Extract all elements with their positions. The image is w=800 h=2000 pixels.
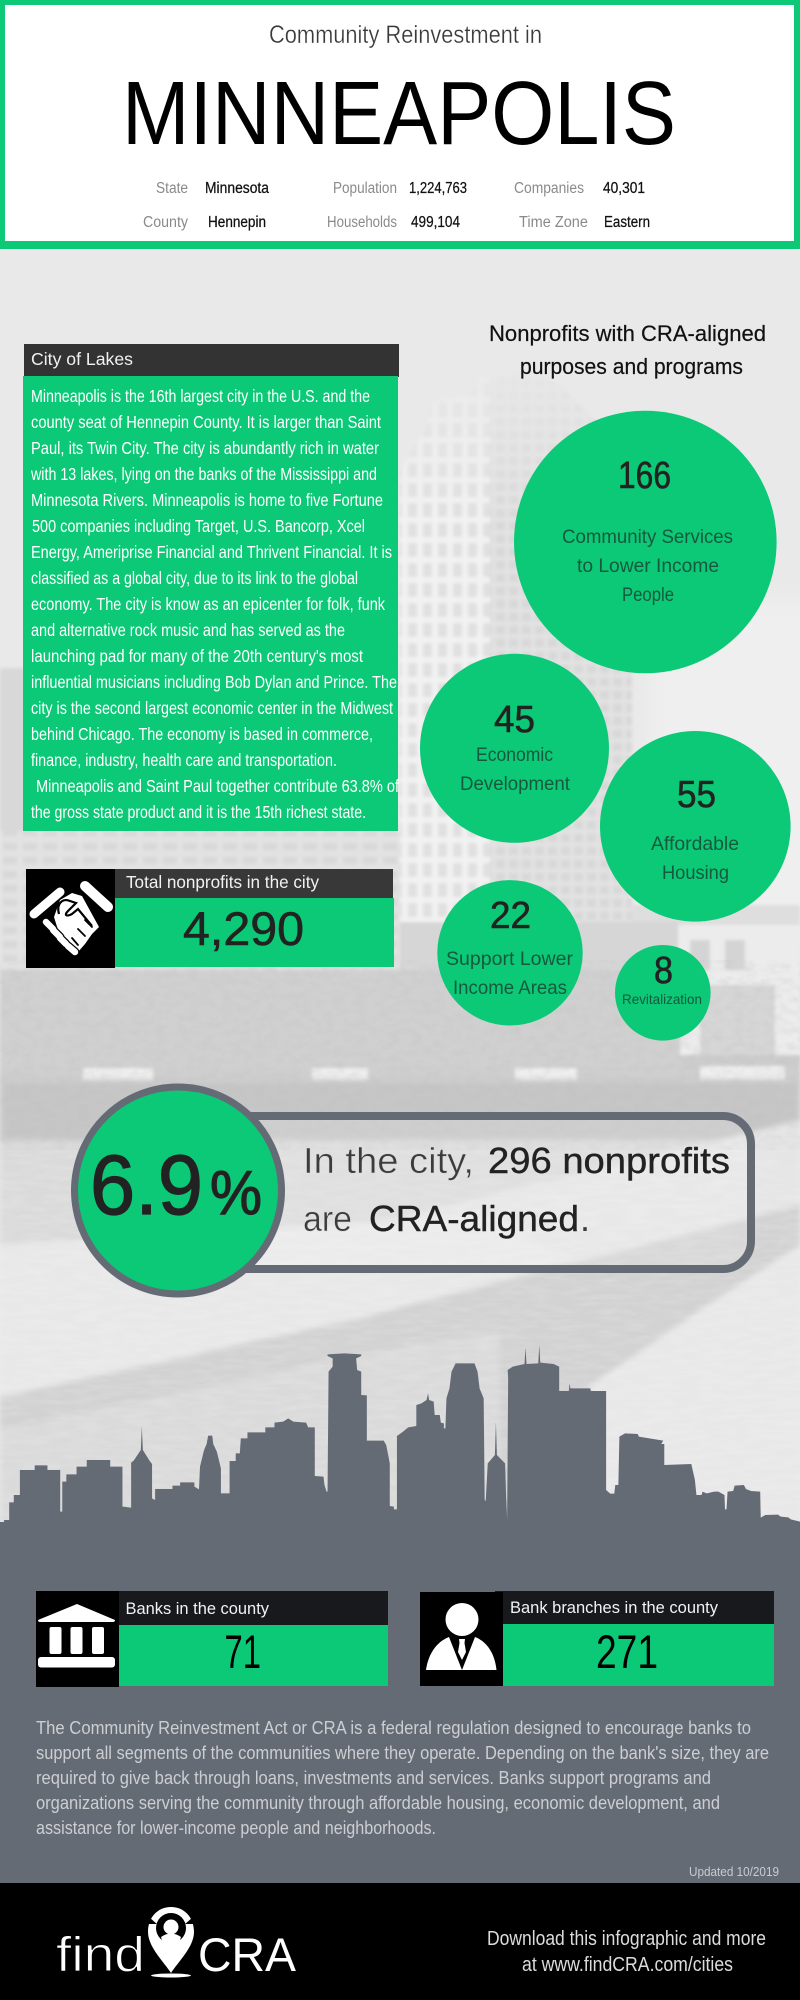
circle: Community Services to Lower Income People: Community Services [562,526,733,548]
text block: explanation of the CRA: required to give back through loans, investments and services. Banks support programs and [36,1768,711,1788]
callout: 6.9% of nonprofits are CRA-aligned [74,1087,751,1294]
panel body text: influential musicians including Bob Dylan and Prince. The [31,672,397,692]
circle: Economic Development [420,654,609,843]
panel body text: and alternative rock music and has served as the [31,620,345,640]
circle: Economic Development: Development [460,773,571,795]
callout sentence: In the city, [303,1140,474,1181]
circle: Affordable Housing: Housing [662,862,729,884]
city facts table: 40,301 [603,180,645,197]
stat label: Total nonprofits in the city [126,872,319,892]
city facts table: State [156,180,188,197]
circle: Affordable Housing: 55 [677,774,716,816]
stat value: 271 [596,1625,658,1678]
text block: explanation of the CRA: organizations serving the community through affordable housing, economic development, and [36,1793,720,1813]
circle: Community Services to Lower Income People: to Lower Income [577,555,719,577]
download note [487,1928,766,1976]
circle: Support Lower Income Areas: Support Lower [446,948,574,970]
logo: findCRA: find [56,1928,145,1982]
skyline silhouette [0,1345,800,1884]
circle: Support Lower Income Areas: Income Areas [453,977,567,999]
circle: Affordable Housing: Affordable [651,833,739,855]
city facts table: Time Zone [519,214,588,231]
city facts table: Eastern [604,214,650,231]
download note: at www.findCRA.com/cities [522,1954,733,1976]
text block: explanation of the CRA: assistance for lower-income people and neighborhoods. [36,1818,436,1838]
percentage value: 6.9 [90,1138,203,1232]
updated date: Updated 10/2019 [689,1864,779,1879]
city facts table: Hennepin [208,214,266,231]
text block: explanation of the CRA: The Community Reinvestment Act or CRA is a federal regulation designed to encourage banks to [36,1718,751,1738]
panel: City of Lakes [23,344,399,831]
heading: Nonprofits with CRA-aligned purposes and programs [489,321,766,379]
callout sentence [303,1140,730,1239]
callout sentence: are [303,1198,352,1239]
panel body text: 500 companies including Target, U.S. Bancorp, Xcel [32,516,365,536]
percentage value: % [210,1159,262,1228]
footer [0,1883,800,2000]
panel body text: county seat of Hennepin County. It is larger than Saint [31,412,381,432]
city facts table: Minnesota [205,180,269,197]
stat label: Bank branches in the county [510,1598,718,1617]
circle: Support Lower Income Areas [437,880,583,1026]
circle: Economic Development: 45 [494,699,535,741]
city facts table: 499,104 [411,214,460,231]
stat value: 71 [224,1625,261,1678]
logo: findCRA [56,1907,297,1982]
panel body text: Minneapolis is the 16th largest city in the U.S. and the [31,386,370,406]
city facts table [143,180,650,231]
text block: explanation of the CRA [36,1718,769,1838]
panel body text: classified as a global city, due to its link to the global [31,568,358,588]
panel body text [30,386,399,822]
logo: findCRA: CRA [198,1928,297,1981]
panel body text: city is the second largest economic center in the Midwest [31,698,393,718]
callout sentence: . [580,1198,590,1239]
panel body text: Minneapolis and Saint Paul together contribute 63.8% of [36,776,399,796]
title: MINNEAPOLIS: MINNEAPOLIS [122,64,676,164]
percentage value [90,1138,262,1232]
circle: Community Services to Lower Income People [514,411,777,673]
circle: Revitalization: 8 [654,950,673,992]
panel body text: with 13 lakes, lying on the banks of the Mississippi and [30,464,377,484]
circle: Affordable Housing [600,731,791,922]
circle: Revitalization [615,945,711,1041]
city facts table: County [143,214,188,231]
stat: bank branches in the county [420,1591,774,1686]
stat label: Banks in the county [126,1599,269,1618]
panel heading: City of Lakes [31,349,133,369]
title: Community Reinvestment in: Community Reinvestment in [269,21,542,49]
background photo: grayscale Minneapolis riverfront [0,249,800,1530]
city facts table: Population [333,180,397,197]
stat: banks in the county [36,1591,388,1687]
icon: handshake [34,886,108,952]
heading: Nonprofits with CRA-aligned purposes and programs: Nonprofits with CRA-aligned [489,321,766,346]
panel body text: launching pad for many of the 20th century's most [31,646,363,666]
panel body text: Paul, its Twin City. The city is abundantly rich in water [31,438,379,458]
panel body text: behind Chicago. The economy is based in commerce, [31,724,373,744]
panel body text: the gross state product and it is the 15th richest state. [31,802,366,822]
circle: Community Services to Lower Income People: People [622,584,674,606]
panel body text: finance, industry, health care and transportation. [31,750,337,770]
city facts table: Households [327,214,397,231]
stat value: 4,290 [183,902,304,955]
callout sentence: 296 nonprofits [488,1140,730,1181]
panel body text: Minnesota Rivers. Minneapolis is home to five Fortune [31,490,383,510]
icon: map pin [148,1907,194,1978]
icon: bank building [38,1604,115,1668]
circle: Community Services to Lower Income People: 166 [618,455,671,497]
city facts table: 1,224,763 [409,180,467,197]
download note: Download this infographic and more [487,1928,766,1950]
stat: total nonprofits in the city [26,869,394,968]
circle: Economic Development: Economic [476,744,553,766]
circle: Support Lower Income Areas: 22 [490,895,531,937]
panel body text: Energy, Ameriprise Financial and Thrivent Financial. It is [31,542,392,562]
header panel [0,0,800,249]
icon: person in suit [426,1603,496,1670]
callout sentence: CRA-aligned [369,1198,579,1239]
circle: Revitalization: Revitalization [622,991,702,1007]
heading: Nonprofits with CRA-aligned purposes and programs: purposes and programs [520,354,743,379]
panel body text: economy. The city is know as an epicenter for folk, funk [31,594,385,614]
city facts table: Companies [514,180,584,197]
